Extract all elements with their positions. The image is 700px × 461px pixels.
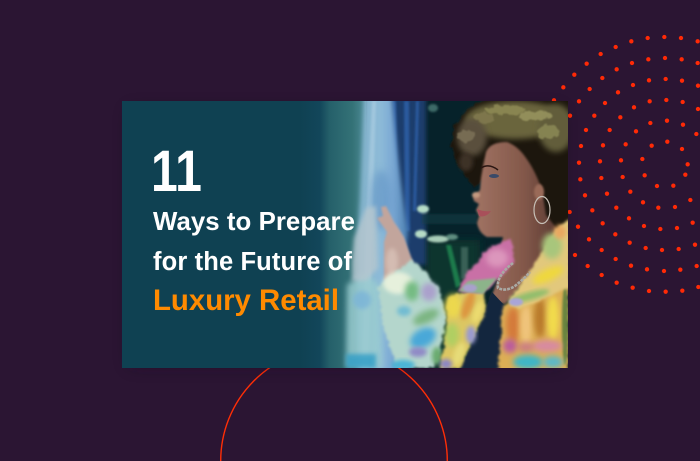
photo: face and neck — [472, 142, 558, 304]
highlighted line: Luxury Retail — [153, 284, 339, 317]
photo: silver necklace — [498, 263, 530, 290]
subtitle line 2: for the Future of — [153, 248, 352, 276]
photo: window lights — [415, 104, 477, 288]
photo: reflection of arm — [346, 206, 382, 368]
teal panel — [122, 101, 300, 368]
photo card — [122, 95, 575, 372]
decorative red dot pattern — [552, 35, 700, 294]
subtitle line 1: Ways to Prepare — [153, 208, 355, 236]
title — [151, 140, 355, 317]
photo: dark top — [460, 292, 505, 368]
photo: rainbow coat sleeve — [378, 259, 447, 370]
photo: hair — [450, 101, 568, 227]
photo: pink coat collar — [458, 238, 514, 294]
photo: coat body — [440, 284, 568, 372]
photo: store window background — [320, 101, 568, 368]
photo: rainbow coat collar — [507, 218, 570, 309]
photo: raised hand — [377, 206, 413, 284]
card shadow — [130, 110, 560, 365]
number 11: 11 — [151, 140, 202, 204]
photo: hoop earring — [534, 196, 550, 224]
decorative red circle outline — [221, 348, 447, 461]
